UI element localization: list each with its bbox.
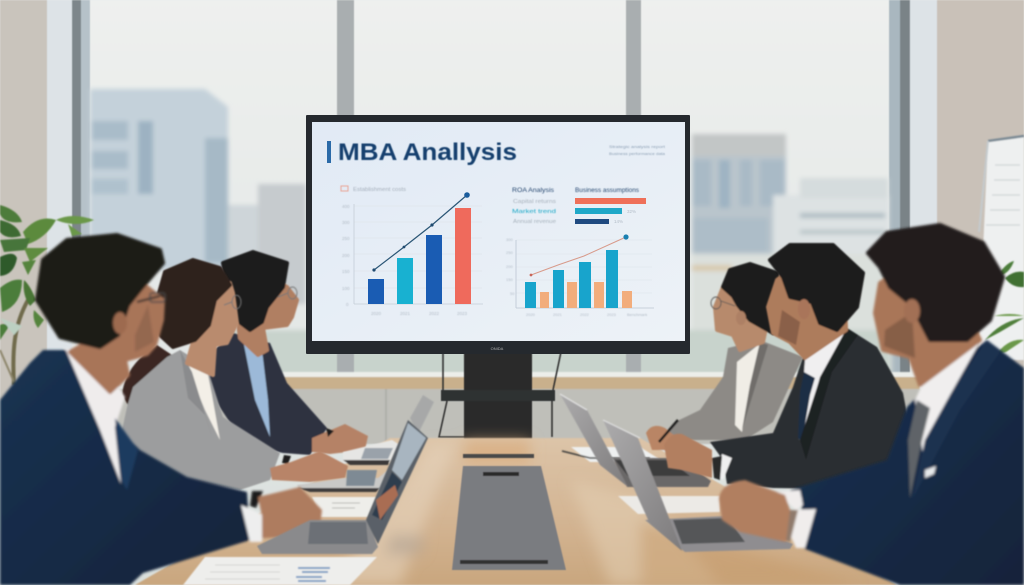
trend line — [372, 192, 470, 272]
neck and face — [70, 287, 163, 392]
watch — [712, 456, 722, 480]
grid and axis labels: 2020 — [371, 311, 382, 316]
person: woman in grey blazer — [120, 260, 348, 490]
face and neck — [875, 270, 980, 385]
glasses — [711, 297, 735, 309]
grid and axis labels: 300 — [342, 220, 350, 225]
horizontal bars: Business assumptions — [575, 188, 639, 194]
hair — [770, 245, 863, 330]
paper: front — [183, 557, 377, 585]
shirt — [915, 342, 980, 470]
grid and labels: 2023 — [607, 312, 617, 317]
jacket — [660, 340, 803, 440]
grid and labels: 2020 — [526, 312, 536, 317]
grid and axis labels: 2023 — [457, 311, 468, 316]
right chart — [506, 234, 654, 317]
neck and face — [187, 283, 237, 375]
horizontal bars: 14% — [614, 219, 623, 224]
watch — [282, 455, 291, 464]
ear — [736, 311, 746, 325]
jacket — [0, 350, 250, 585]
hand — [646, 426, 680, 450]
grid and axis labels: 200 — [342, 253, 350, 258]
window mullions — [337, 0, 641, 375]
watch — [250, 491, 263, 508]
table centre runner — [452, 454, 566, 570]
ponytail — [122, 345, 172, 405]
key figures list: Annual revenue — [513, 219, 556, 225]
jacket lapel — [800, 328, 858, 460]
top right caption: Business performance data — [609, 151, 666, 156]
ear — [113, 312, 127, 334]
shirt — [186, 364, 220, 440]
key figures list: ROA Analysis — [512, 188, 554, 194]
bars — [525, 250, 632, 308]
window sill and lower wall — [100, 372, 960, 444]
display brand label: ONIDA — [491, 346, 504, 351]
laptop: middle left — [297, 470, 388, 492]
table reflections — [330, 440, 860, 585]
grid and axis labels: 100 — [342, 286, 350, 291]
jacket lapel — [912, 340, 1000, 500]
pen — [659, 420, 678, 442]
person: man in navy suit, left — [0, 235, 322, 585]
shirt — [65, 348, 125, 484]
wall display screen — [306, 115, 690, 354]
person: woman right with pen — [646, 264, 803, 450]
cuff — [776, 490, 816, 548]
trend line — [530, 234, 629, 276]
neck and face — [715, 280, 770, 350]
laptop: front left — [257, 420, 428, 554]
watch — [326, 428, 334, 437]
slide title: MBA Anallysis — [338, 139, 517, 166]
paper: left — [312, 497, 377, 517]
grid and axis labels: 2022 — [429, 311, 440, 316]
hands — [664, 434, 712, 478]
monitor stand — [439, 352, 561, 440]
neck and face — [235, 275, 297, 355]
grid and labels: 200 — [506, 264, 513, 269]
glasses — [137, 296, 160, 302]
grid and labels: 50 — [510, 291, 515, 296]
key figures list: Market trend — [512, 209, 556, 215]
ear — [904, 299, 920, 323]
top right caption — [609, 144, 666, 156]
legend: Establishment costs — [353, 187, 406, 193]
person: man in navy suit, right — [719, 225, 1024, 585]
grid and labels: 2021 — [553, 312, 563, 317]
paper: far right — [562, 447, 664, 462]
grid and labels: 150 — [506, 277, 513, 282]
glasses — [224, 295, 241, 309]
grid and labels: 300 — [506, 237, 513, 242]
laptop: front right — [603, 420, 793, 552]
jacket — [120, 350, 280, 490]
bars — [368, 208, 471, 304]
jacket — [203, 333, 327, 455]
display frame — [306, 115, 690, 354]
display panel — [312, 122, 685, 341]
hand — [270, 451, 348, 482]
grid and labels: Benchmark — [627, 312, 647, 317]
pocket square — [925, 466, 936, 478]
grid and axis labels — [342, 204, 483, 316]
plant: right — [985, 261, 1024, 355]
horizontal bars — [575, 188, 646, 224]
blue shirt — [243, 340, 270, 437]
legend — [341, 186, 406, 193]
grid and labels — [506, 237, 654, 317]
lapel — [180, 350, 213, 440]
background: city buildings — [90, 89, 892, 375]
hand — [258, 487, 322, 538]
hand — [719, 480, 790, 542]
glasses — [278, 287, 297, 299]
grid and axis labels: 250 — [342, 236, 350, 241]
laptop: back right — [560, 394, 711, 487]
person: man in dark suit — [664, 245, 912, 490]
laptop: far left — [343, 395, 434, 465]
top right caption: Strategic analysis report — [609, 144, 666, 149]
left chart — [341, 186, 483, 316]
cuff — [241, 505, 264, 542]
hand — [312, 424, 368, 454]
cuff — [715, 454, 732, 480]
key figures list — [512, 188, 556, 225]
table — [135, 438, 897, 585]
person: woman with blue shirt, back left — [203, 252, 368, 455]
tie — [798, 372, 815, 442]
face and neck — [768, 262, 846, 358]
grid and axis labels: 400 — [342, 204, 350, 209]
grid and axis labels: 150 — [342, 269, 350, 274]
tie — [908, 400, 930, 498]
jacket — [790, 340, 1024, 585]
grid and axis labels: 2021 — [400, 311, 411, 316]
shirt — [799, 330, 846, 440]
ear — [798, 299, 810, 319]
watch — [784, 510, 798, 542]
key figures list: Capital returns — [513, 199, 556, 205]
grid and labels: 2022 — [580, 312, 590, 317]
plant: left — [0, 205, 94, 385]
paper: right — [618, 496, 720, 514]
hair — [157, 260, 230, 347]
shirt — [735, 342, 762, 432]
whiteboard — [978, 136, 1024, 360]
grid and labels: 250 — [506, 250, 513, 255]
horizontal bars: 32% — [627, 209, 636, 214]
jacket — [710, 328, 912, 490]
grid and axis labels: 0 — [346, 302, 349, 307]
hair — [868, 225, 1003, 340]
hair — [223, 252, 287, 330]
hair — [723, 264, 782, 333]
hair — [37, 235, 163, 347]
lapel — [115, 418, 138, 490]
